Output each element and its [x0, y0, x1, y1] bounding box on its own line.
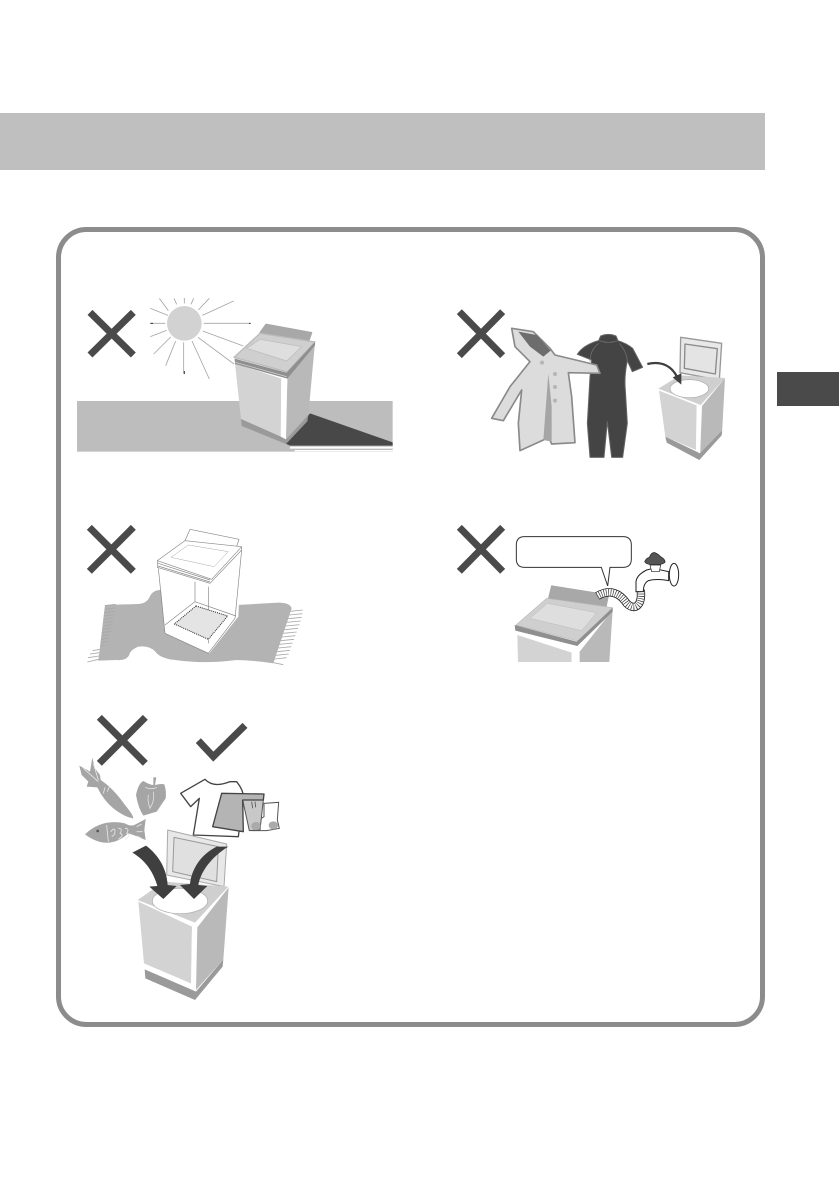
main panel — [58, 230, 762, 1024]
fish — [85, 819, 146, 843]
washer — [138, 830, 229, 1000]
scene: washer in direct sunlight — [77, 298, 393, 452]
side tab — [777, 372, 839, 406]
header band — [0, 113, 765, 170]
washer — [515, 586, 613, 662]
scene: hose on tap — [459, 527, 679, 662]
tap — [636, 553, 679, 592]
shadow — [285, 413, 393, 446]
washer with open lid — [658, 337, 725, 460]
hose — [597, 590, 641, 607]
icon: cross — [99, 717, 145, 763]
socks — [251, 802, 279, 831]
speech bubble — [516, 537, 631, 586]
icon: sun — [150, 298, 251, 379]
rug — [87, 590, 303, 665]
icon: cross — [90, 312, 133, 355]
scene: washer on a rug — [87, 527, 303, 665]
wetsuit — [577, 334, 643, 457]
icon: check — [198, 725, 245, 757]
scene: waterproof clothing — [459, 312, 725, 460]
washer — [234, 324, 315, 444]
icon: cross — [459, 527, 503, 571]
arrows — [132, 846, 228, 899]
raincoat — [492, 328, 600, 451]
washer outline — [157, 529, 242, 653]
shorts — [213, 793, 278, 832]
floor — [77, 401, 393, 452]
scene: laundry only — [79, 717, 279, 1000]
carrot — [79, 758, 133, 818]
icon: cross — [459, 312, 503, 356]
icon: cross — [89, 527, 133, 571]
pepper — [136, 777, 166, 816]
t-shirt — [181, 779, 243, 837]
arrow — [647, 363, 681, 385]
